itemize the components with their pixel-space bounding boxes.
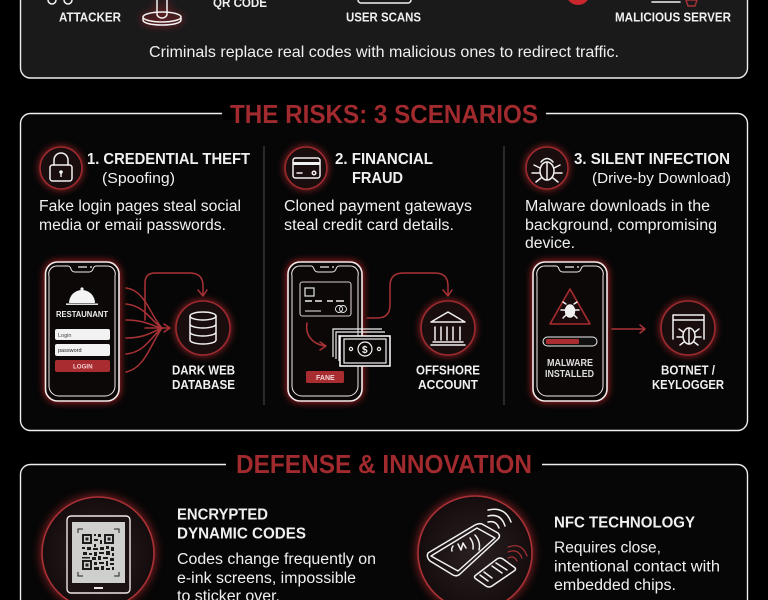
heading: defense and innovation: DEFENSE & INNOVATION [236, 449, 532, 479]
label: user scans: USER SCANS [346, 10, 421, 24]
icon: warning bug [550, 289, 590, 324]
scenario 2: financial fraud [284, 147, 480, 401]
icon: bank [421, 301, 475, 355]
icon: bug [526, 147, 568, 189]
arrows: stolen data streams [126, 273, 207, 372]
label: malware installed [545, 358, 594, 380]
heading: credential theft: 1. CREDENTIAL THEFT [87, 151, 250, 168]
text: financial fraud description [284, 198, 472, 234]
label: offshore account: OFFSHORE [416, 364, 480, 378]
heading: encrypted dynamic codes: ENCRYPTED [177, 506, 268, 524]
icon: malicious server [652, 0, 697, 6]
illustration: cloned payment phone [288, 262, 390, 401]
icon: attacker [48, 0, 72, 4]
heading: the risks: THE RISKS: 3 SCENARIOS [230, 99, 538, 129]
arrow: to botnet [612, 325, 645, 333]
icon: database [176, 301, 230, 355]
text: financial fraud description: steal credit card details. [284, 217, 454, 234]
panel: the risks [20, 99, 748, 430]
icon: QR code stand [143, 0, 181, 25]
text: credential theft description: Fake login pages steal social [39, 198, 241, 215]
heading: NFC technology: NFC TECHNOLOGY [554, 514, 695, 532]
icon: cloche [66, 287, 98, 305]
label: offshore account [416, 364, 480, 392]
arrow: to offshore account [367, 273, 452, 318]
text: credential theft description: media or emaii passwords. [39, 217, 226, 234]
label: dark web database: DATABASE [172, 378, 235, 392]
icon: NFC phone and chip [418, 496, 532, 600]
subheading: spoofing: (Spoofing) [102, 170, 175, 187]
label: malware installed: MALWARE [547, 358, 593, 369]
icon: user device [358, 0, 411, 3]
heading: financial fraud [335, 151, 433, 187]
icon: browser bug [661, 301, 715, 355]
icon: card on screen [300, 282, 351, 316]
panel: how the attack works [20, 0, 748, 78]
illustration: restaurant phone: LOGIN [73, 364, 93, 370]
heading: financial fraud: FRAUD [352, 170, 403, 187]
text: NFC technology description: embedded chips. [554, 577, 676, 594]
text: encrypted dynamic codes description: Codes change frequently on [177, 551, 376, 568]
icon: banknotes [333, 329, 390, 366]
illustration: restaurant phone [46, 262, 119, 401]
label: botnet keylogger: BOTNET / [661, 364, 715, 378]
text: attack summary: Criminals replace real codes with malicious ones to redirect traffic. [149, 44, 619, 61]
heading: encrypted dynamic codes [177, 506, 306, 542]
text: NFC technology description: Requires close, [554, 540, 661, 556]
text: financial fraud description: Cloned payment gateways [284, 198, 472, 215]
scenario 1: credential theft [39, 147, 250, 401]
illustration: restaurant phone: password [58, 348, 82, 354]
text: NFC technology description [554, 540, 720, 594]
text: silent infection description [525, 198, 717, 252]
label: offshore account: ACCOUNT [418, 378, 478, 392]
illustration: restaurant phone: RESTAUNANT [56, 309, 109, 319]
progress bar [543, 337, 597, 346]
text: encrypted dynamic codes description: e-ink screens, impossible [177, 570, 356, 587]
button: fake: FANE [316, 375, 335, 382]
label: dark web database [172, 364, 235, 392]
heading: silent infection: 3. SILENT INFECTION [574, 151, 730, 168]
panel: defense and innovation [20, 449, 748, 600]
label: attacker: ATTACKER [59, 10, 121, 24]
label: malware installed: INSTALLED [545, 369, 594, 380]
label: botnet keylogger [652, 364, 724, 392]
scenario 3: silent infection [525, 147, 731, 401]
text: silent infection description: Malware downloads in the [525, 198, 710, 215]
heading: financial fraud: 2. FINANCIAL [335, 151, 433, 168]
subheading: drive-by download: (Drive-by Download) [592, 170, 731, 187]
icon: credit card [285, 147, 327, 189]
arrow: card to cash [307, 323, 326, 350]
label: dark web database: DARK WEB [172, 364, 235, 378]
text: silent infection description: background, compromising [525, 217, 717, 234]
text: silent infection description: device. [525, 235, 575, 252]
icon: e-ink dynamic QR tablet [42, 497, 154, 600]
illustration: restaurant phone: Login [58, 333, 71, 339]
icon: red alert dot [566, 0, 590, 5]
heading: encrypted dynamic codes: DYNAMIC CODES [177, 526, 306, 542]
icon: padlock [40, 147, 82, 189]
text: encrypted dynamic codes description [177, 551, 376, 600]
text: NFC technology description: intentional contact with [554, 558, 720, 576]
label: botnet keylogger: KEYLOGGER [652, 378, 724, 392]
illustration: cloned payment phone: $ [362, 345, 368, 356]
text: credential theft description [39, 198, 241, 234]
illustration: malware phone [533, 262, 607, 401]
label: malicious server: MALICIOUS SERVER [615, 10, 731, 24]
